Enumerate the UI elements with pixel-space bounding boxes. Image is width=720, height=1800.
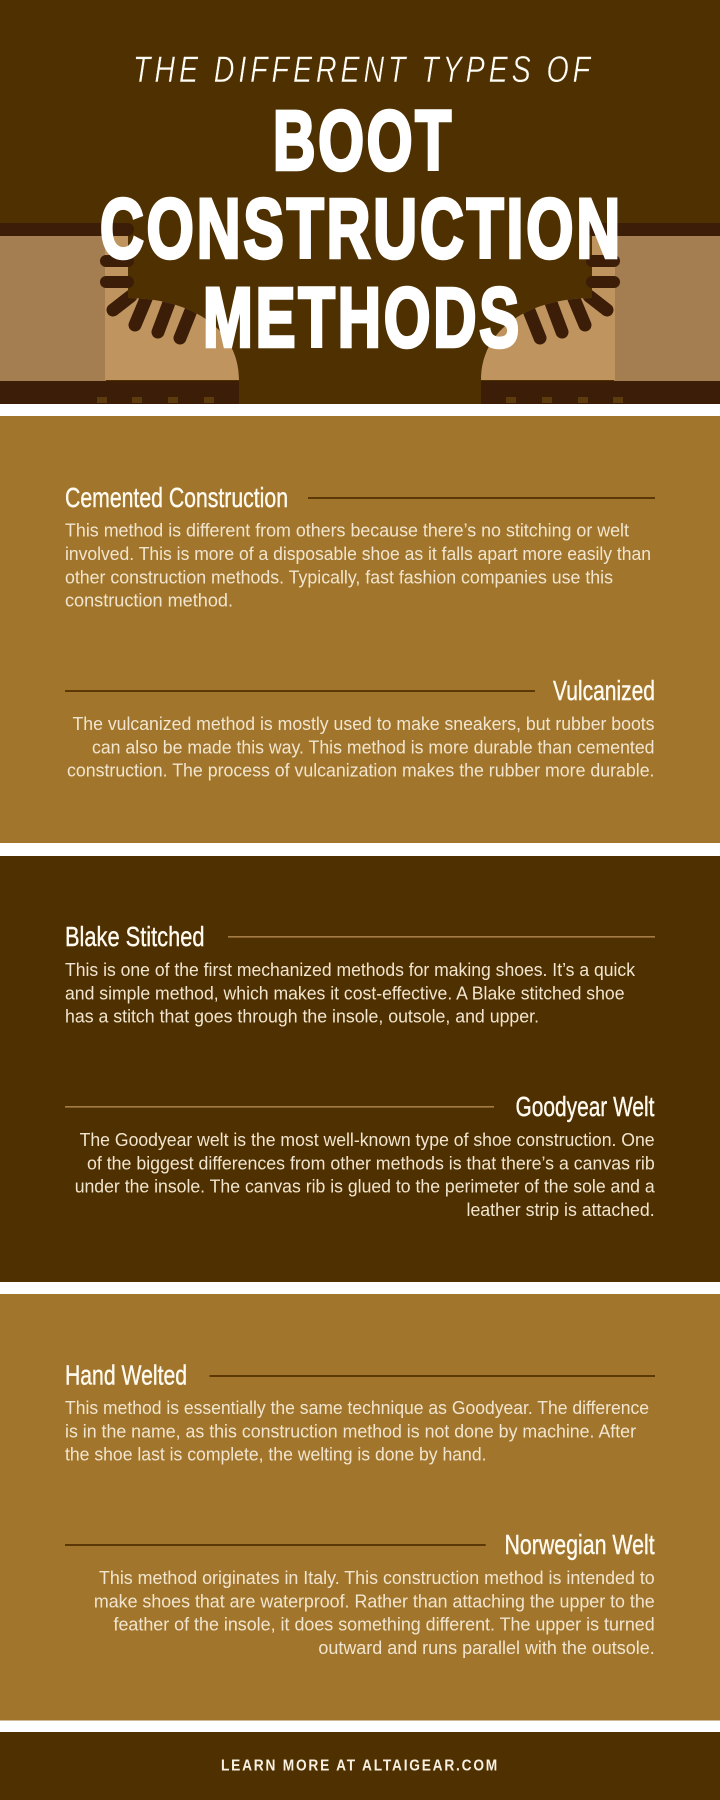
text: norwegian description: make shoes that are waterproof. Rather than attaching the upper to the: [94, 1590, 655, 1611]
heading: blake stitched: Blake Stitched: [65, 921, 204, 952]
text: cemented description: other construction methods. Typically, fast fashion companies use this: [65, 566, 613, 587]
text: blake description: This is one of the first mechanized methods for making shoes. It’s a quick: [65, 959, 636, 980]
text: blake description: has a stitch that goes through the insole, outsole, and upper.: [65, 1006, 539, 1027]
text: cemented description: [65, 520, 651, 611]
section: goodyear welt: [65, 1091, 655, 1220]
text: norwegian description: This method originates in Italy. This construction method is intended to: [99, 1567, 655, 1588]
text: goodyear description: under the insole. The canvas rib is glued to the perimeter of the sole and a: [75, 1176, 655, 1197]
text: cemented description: This method is different from others because there’s no stitching or welt: [65, 520, 629, 541]
section: blake stitched: [65, 921, 655, 1027]
title: main: BOOT: [273, 94, 454, 188]
text: norwegian description: [94, 1567, 655, 1658]
text: blake description: and simple method, which makes it cost-effective. A Blake stitched shoe: [65, 982, 624, 1003]
text: goodyear description: leather strip is attached.: [466, 1199, 655, 1220]
text: cemented description: construction method.: [65, 590, 233, 611]
text: blake description: [65, 959, 636, 1027]
section: norwegian welt: [65, 1529, 655, 1658]
text: hand welted description: is in the name, as this construction method is not done by machine. After: [65, 1420, 636, 1441]
text: hand welted description: [65, 1397, 649, 1465]
title: main: METHODS: [203, 270, 522, 364]
text: vulcanized description: can also be made this way. This method is more durable than cemented: [92, 736, 654, 757]
title: main: [100, 94, 623, 364]
text: cemented description: involved. This is more of a disposable shoe as it falls apart more easily than: [65, 543, 651, 564]
heading: cemented construction: Cemented Construction: [65, 482, 288, 513]
text: goodyear description: The Goodyear welt is the most well-known type of shoe construction. One: [80, 1129, 655, 1150]
panel: blake stitched and goodyear welt: [0, 856, 720, 1282]
panel: hand welted and norwegian welt: [0, 1294, 720, 1720]
heading: goodyear welt: Goodyear Welt: [516, 1091, 655, 1122]
text: goodyear description: of the biggest differences from other methods is that there’s a canvas rib: [87, 1152, 655, 1173]
text: hand welted description: the shoe last is complete, the welting is done by hand.: [65, 1444, 486, 1465]
text: vulcanized description: The vulcanized method is mostly used to make sneakers, but rubber boots: [72, 713, 654, 734]
text: goodyear description: [75, 1129, 655, 1220]
panel: header: [0, 0, 720, 404]
heading: norwegian welt: Norwegian Welt: [504, 1529, 655, 1560]
heading: hand welted: Hand Welted: [65, 1359, 187, 1390]
illustration: left boot: [0, 223, 239, 404]
title: kicker: THE DIFFERENT TYPES OF: [133, 49, 594, 90]
section: vulcanized: [65, 675, 655, 781]
text: vulcanized description: construction. The process of vulcanization makes the rubber more durable.: [67, 760, 654, 781]
heading: vulcanized: Vulcanized: [553, 675, 655, 706]
section: cemented construction: [65, 482, 655, 611]
panel: footer: [0, 1732, 720, 1800]
illustration: right boot: [481, 223, 720, 404]
text: footer call to action: LEARN MORE AT ALTAIGEAR.COM: [221, 1758, 499, 1775]
section: hand welted: [65, 1359, 655, 1465]
text: vulcanized description: [67, 713, 654, 781]
text: hand welted description: This method is essentially the same technique as Goodyear. The difference: [65, 1397, 649, 1418]
panel: cemented and vulcanized: [0, 416, 720, 843]
text: norwegian description: feather of the insole, it does something different. The upper is turned: [114, 1614, 655, 1635]
text: norwegian description: outward and runs parallel with the outsole.: [318, 1637, 655, 1658]
